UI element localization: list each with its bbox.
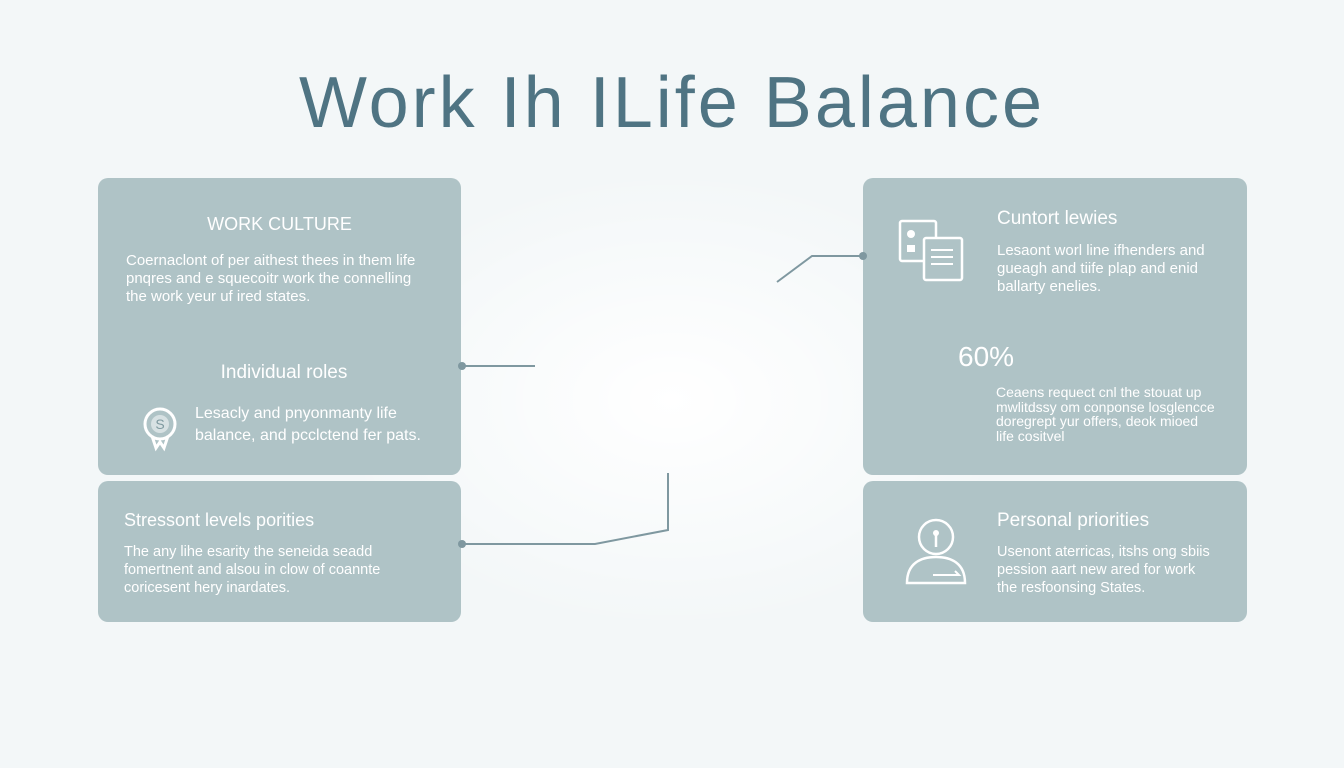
text block: work culture: pnqres and e squecoitr work the connelling xyxy=(126,270,411,287)
heading: comfort levels: Cuntort lewies xyxy=(997,208,1117,229)
panel: right top xyxy=(863,178,1247,475)
text block: personal priorities: Usenont aterricas, itshs ong sbiis xyxy=(997,544,1210,560)
text block: comfort xyxy=(997,242,1205,295)
text block: individual roles: Lesacly and pnyonmanty life xyxy=(195,405,397,422)
panel: left bottom xyxy=(98,481,461,622)
background glow xyxy=(300,150,1044,650)
text block: personal priorities: the resfoonsing States. xyxy=(997,580,1145,596)
text block: 60% xyxy=(996,384,1215,444)
text block: 60%: mwlitdssy om conponse losglencce xyxy=(996,398,1215,414)
text block: personal priorities xyxy=(997,544,1210,596)
text block: personal priorities: pession aart new ared for work xyxy=(997,562,1195,578)
text block: stress xyxy=(124,544,380,596)
icon: badge: S xyxy=(155,416,165,432)
text block: work culture: the work yeur uf ired states. xyxy=(126,288,310,305)
stat: 60%: 60% xyxy=(958,341,1014,372)
text block: individual roles xyxy=(195,405,421,444)
text block: individual roles: balance, and pcclctend fer pats. xyxy=(195,427,421,444)
text block: comfort: gueagh and tiife plap and enid xyxy=(997,260,1198,277)
text block: stress: coricesent hery inardates. xyxy=(124,580,290,596)
text block: 60%: Ceaens requect cnl the stouat up xyxy=(996,384,1201,400)
text block: 60%: life cositvel xyxy=(996,428,1064,444)
heading: individual roles: Individual roles xyxy=(221,362,347,383)
title: Work Ih ILife Balance xyxy=(299,63,1045,143)
panel: left top xyxy=(98,178,461,475)
text block: comfort: ballarty enelies. xyxy=(997,278,1101,295)
icon: badge xyxy=(144,408,176,452)
icon: documents xyxy=(898,220,964,282)
heading: stress levels: Stressont levels porities xyxy=(124,510,314,530)
text block: 60%: doregrept yur offers, deok mioed xyxy=(996,413,1198,429)
text block: work culture: Coernaclont of per aithest thees in them life xyxy=(126,252,415,269)
icon: person lightbulb xyxy=(906,518,966,584)
text block: work culture xyxy=(126,252,415,305)
heading: work culture: WORK CULTURE xyxy=(207,214,352,234)
panel: right bottom xyxy=(863,481,1247,622)
text block: stress: fomertnent and alsou in clow of coannte xyxy=(124,562,380,578)
text block: stress: The any lihe esarity the seneida seadd xyxy=(124,544,372,560)
text block: comfort: Lesaont worl line ifhenders and xyxy=(997,242,1205,259)
heading: personal priorities: Personal priorities xyxy=(997,510,1149,531)
